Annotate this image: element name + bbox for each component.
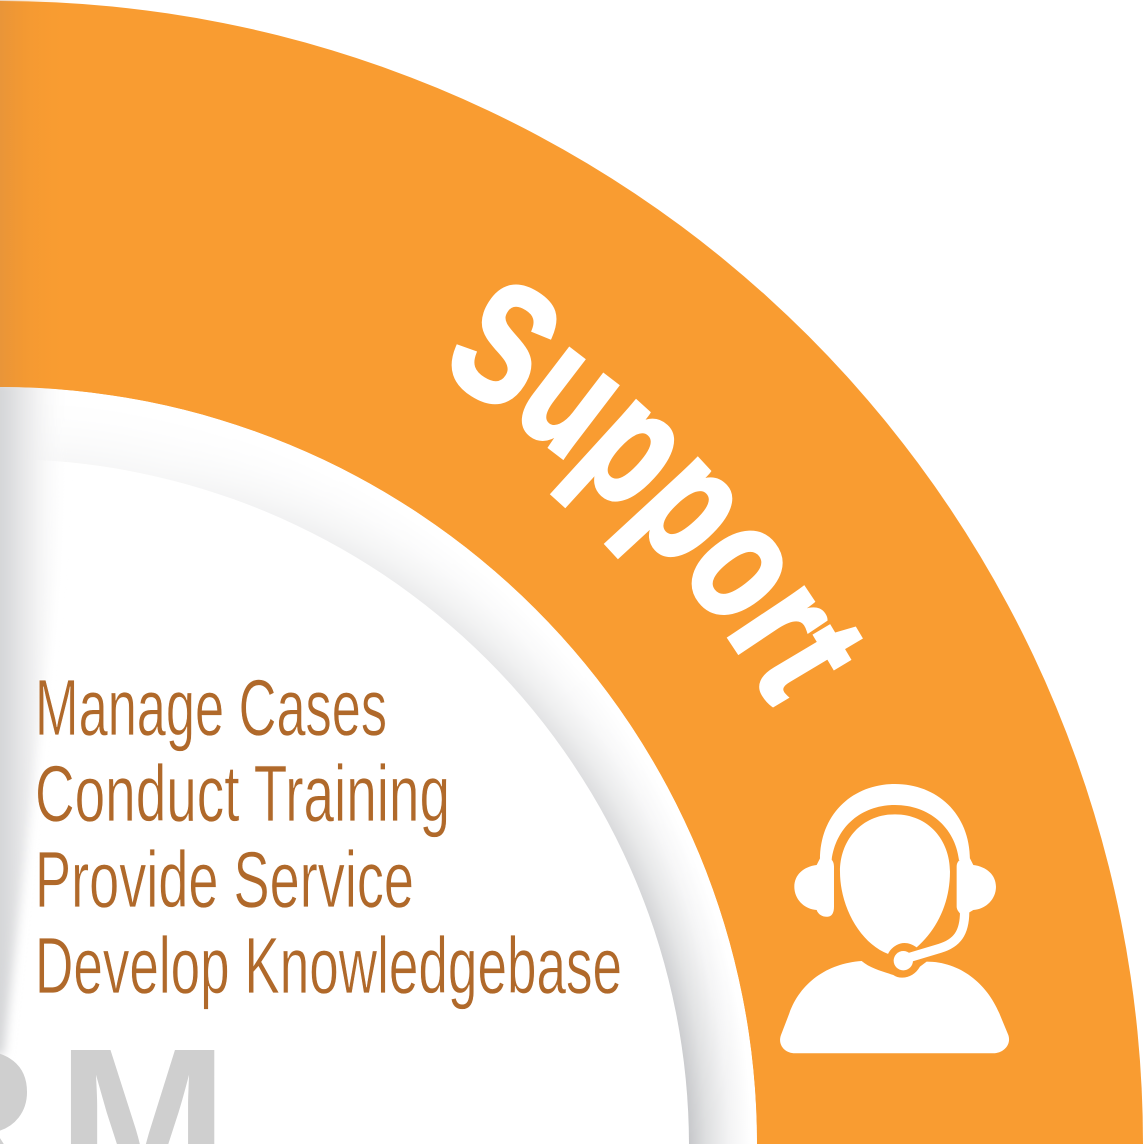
inner white area with shadow bbox=[0, 380, 757, 1144]
list item: Conduct Training: Conduct Training bbox=[35, 749, 450, 838]
heading: Support on arc: Support bbox=[452, 284, 863, 708]
text block: activities list bbox=[35, 663, 622, 1010]
list item: Provide Service: Provide Service bbox=[35, 835, 414, 924]
list item: Manage Cases: Manage Cases bbox=[35, 663, 387, 752]
icon: support agent with headset bbox=[780, 784, 1009, 1053]
list item: Develop Knowledgebase: Develop Knowledgebase bbox=[35, 921, 622, 1010]
